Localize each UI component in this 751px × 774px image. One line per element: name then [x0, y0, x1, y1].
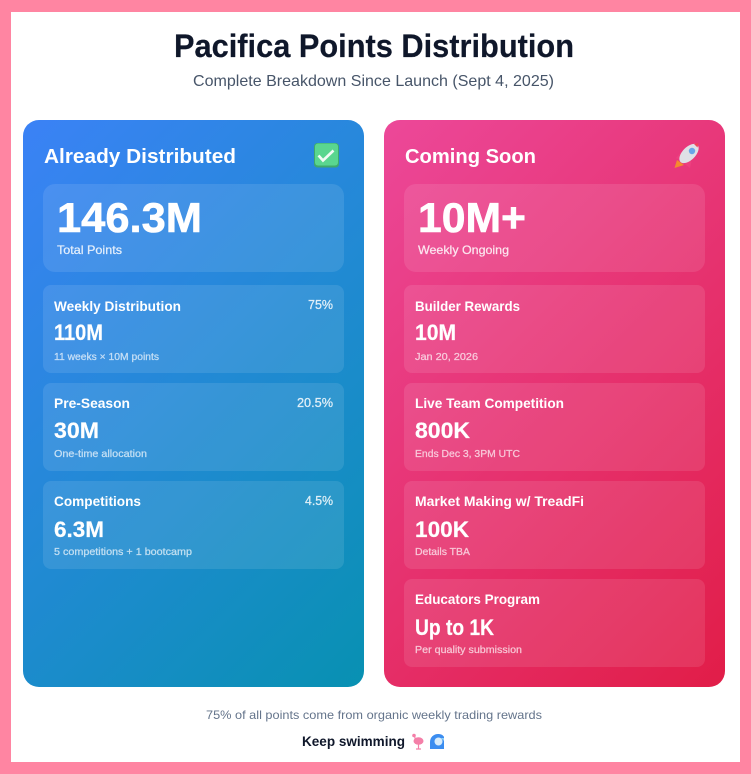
title: Pacifica Points Distribution	[174, 28, 574, 64]
footer sign-off: Keep swimming	[302, 734, 405, 749]
card: live team competition	[404, 383, 705, 471]
total points card	[43, 184, 344, 272]
card: weekly distribution	[43, 285, 344, 373]
card: educators program	[404, 579, 705, 667]
card value: Up to 1K	[415, 615, 494, 640]
card percentage: 75%	[308, 298, 333, 312]
card title: Live Team Competition	[415, 395, 564, 411]
card: market making	[404, 481, 705, 569]
card note: 5 competitions + 1 bootcamp	[54, 546, 192, 558]
card title: Competitions	[54, 493, 141, 509]
icon: wave	[430, 734, 444, 749]
footer note: 75% of all points come from organic weekly trading rewards	[206, 708, 542, 722]
card percentage: 20.5%	[297, 396, 333, 410]
card title: Weekly Distribution	[54, 298, 181, 314]
card title: Builder Rewards	[415, 298, 520, 314]
card value: 100K	[415, 517, 469, 542]
card note: Ends Dec 3, 3PM UTC	[415, 448, 520, 460]
panel heading: coming soon: Coming Soon	[405, 146, 536, 168]
weekly ongoing card	[404, 184, 705, 272]
card note: One-time allocation	[54, 448, 147, 460]
card title: Educators Program	[415, 591, 540, 607]
card value: 6.3M	[54, 517, 104, 542]
card: pre-season	[43, 383, 344, 471]
ongoing label: Weekly Ongoing	[418, 243, 509, 257]
icon: rocket	[674, 140, 702, 168]
subtitle: Complete Breakdown Since Launch (Sept 4, 2025)	[193, 73, 554, 90]
card: competitions	[43, 481, 344, 569]
card note: 11 weeks × 10M points	[54, 351, 159, 363]
icon: flamingo	[412, 734, 424, 749]
icon: check mark	[314, 143, 339, 168]
card value: 800K	[415, 418, 470, 443]
card: builder rewards	[404, 285, 705, 373]
card value: 30M	[54, 418, 99, 443]
panel: coming soon	[384, 120, 725, 687]
panel: already distributed	[23, 120, 364, 687]
card value: 110M	[54, 320, 103, 345]
card title: Market Making w/ TreadFi	[415, 493, 584, 509]
total value: 146.3M	[57, 194, 202, 241]
card percentage: 4.5%	[305, 494, 333, 508]
total label: Total Points	[57, 243, 122, 257]
card title: Pre-Season	[54, 395, 130, 411]
ongoing value: 10M+	[418, 194, 526, 241]
card note: Per quality submission	[415, 644, 522, 656]
card note: Details TBA	[415, 546, 470, 558]
card note: Jan 20, 2026	[415, 351, 478, 363]
card value: 10M	[415, 320, 456, 345]
panel heading: already distributed: Already Distributed	[44, 146, 236, 168]
